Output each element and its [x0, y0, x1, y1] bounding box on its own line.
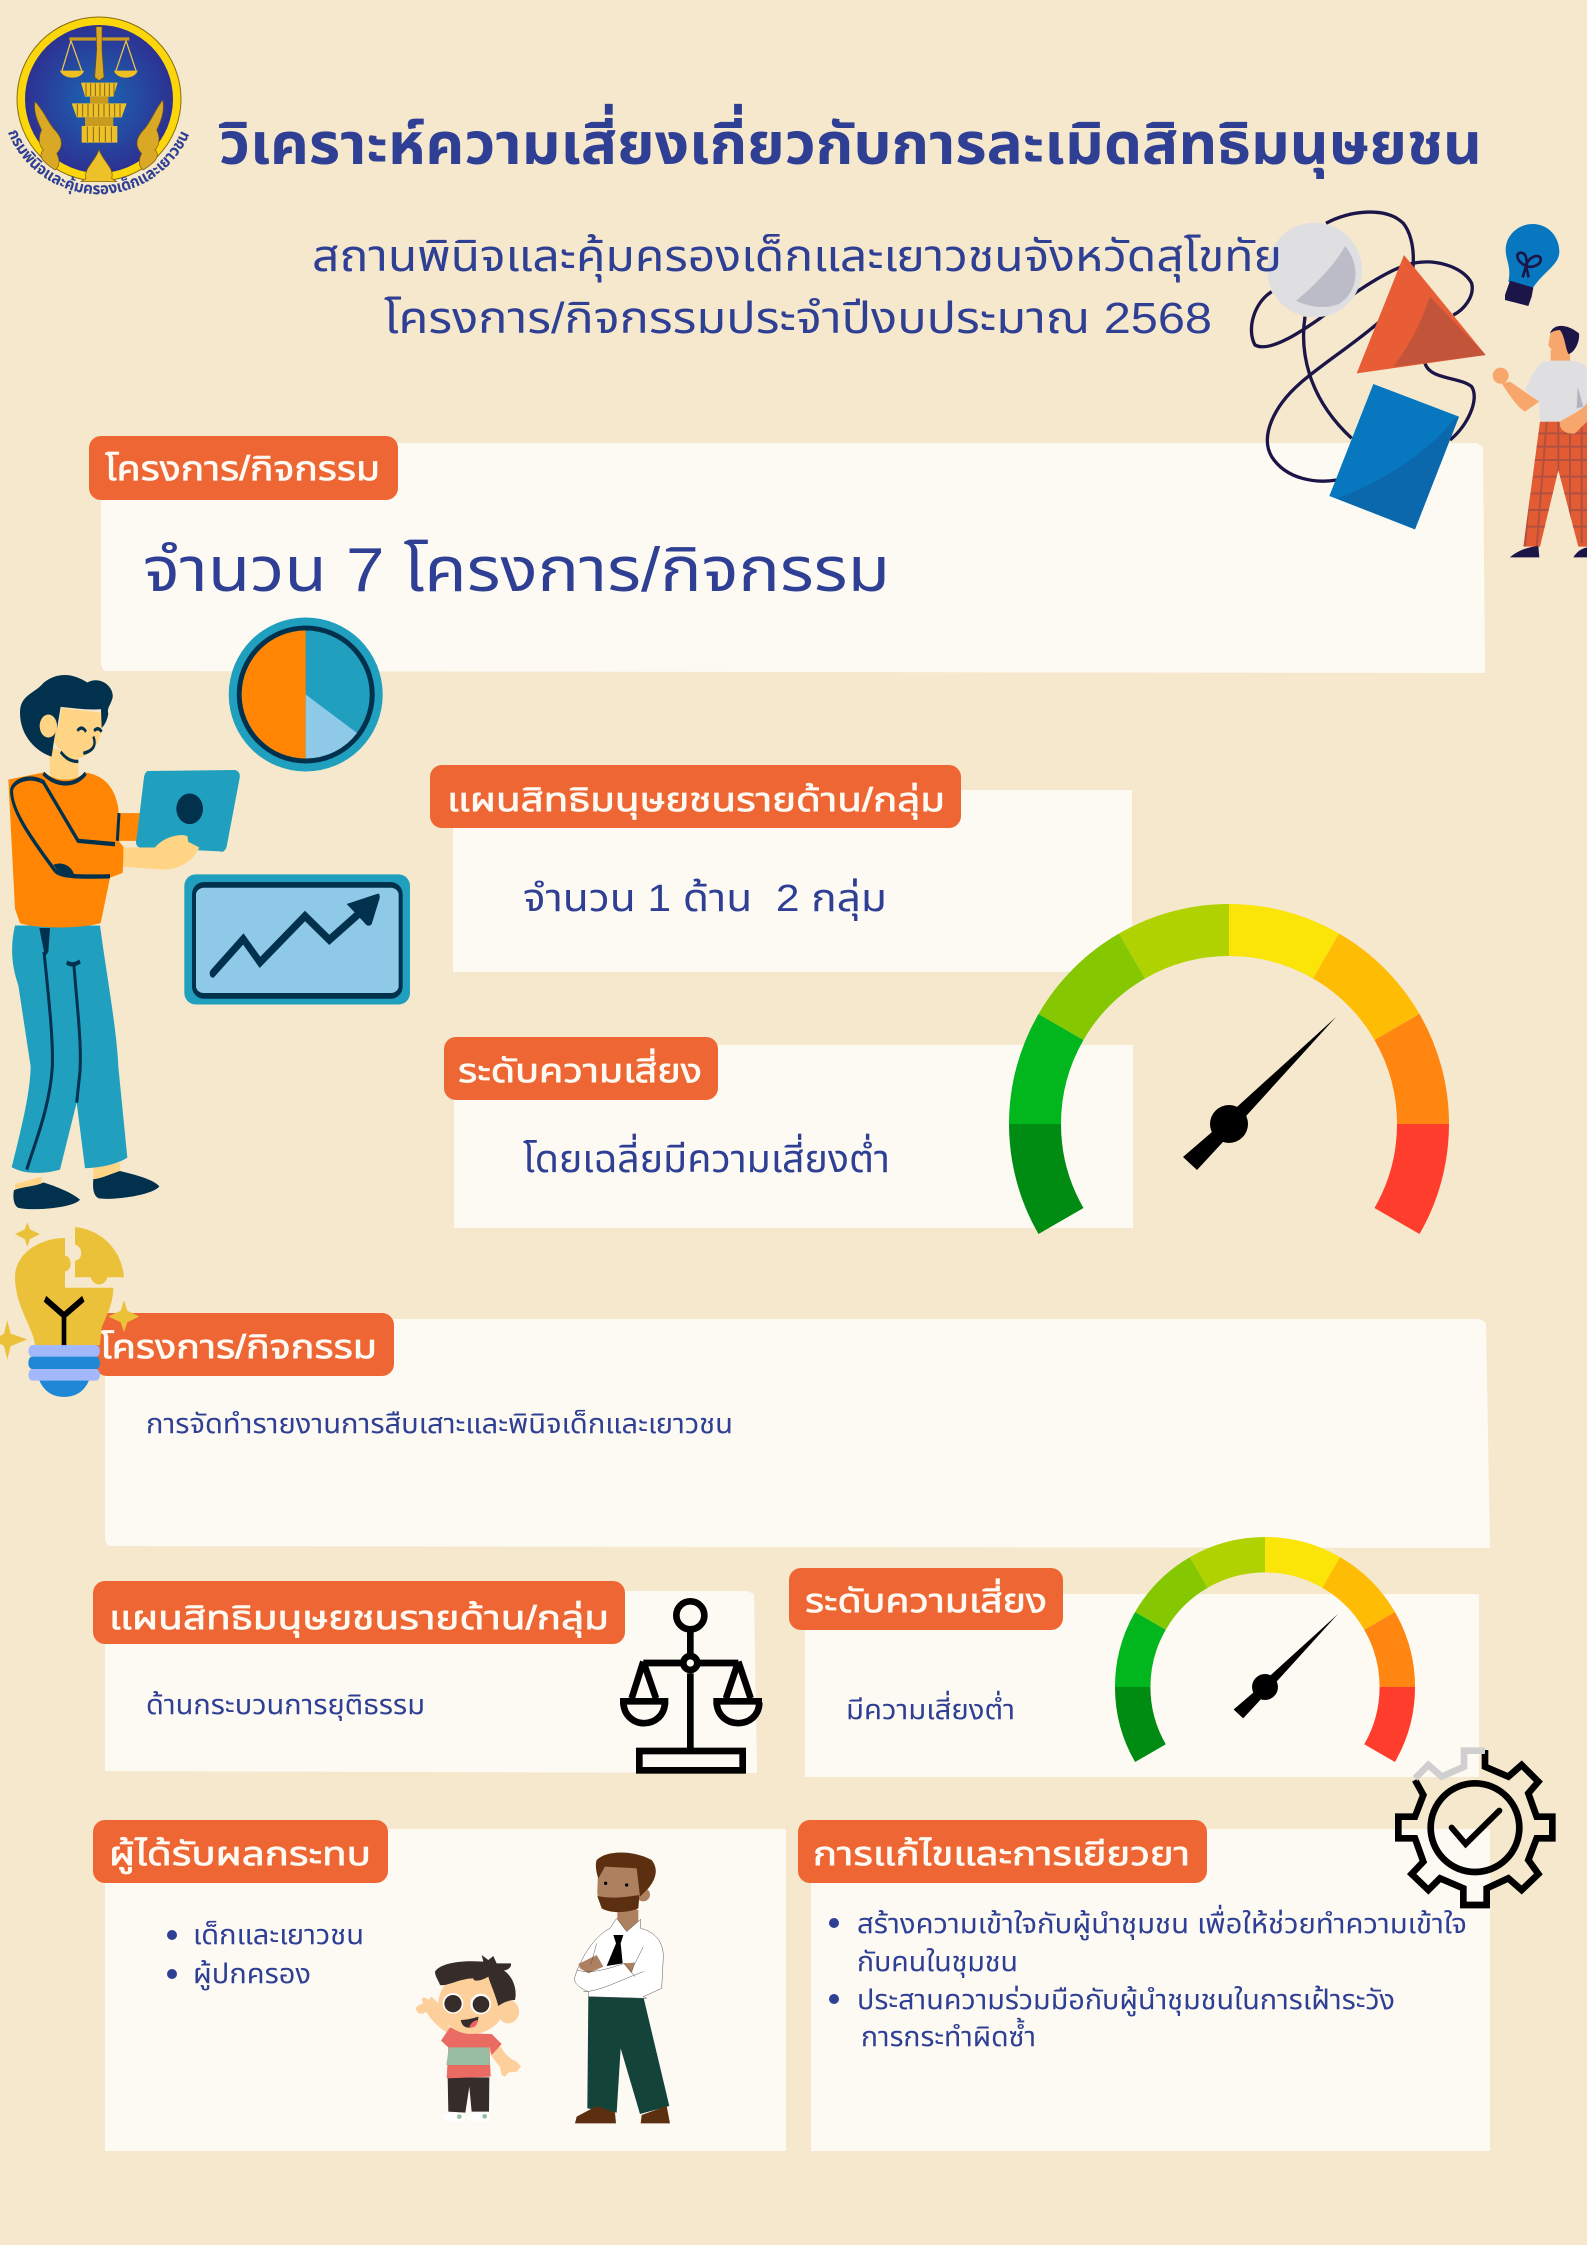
illustration: puzzle light bulb	[0, 1222, 139, 1397]
illustration: standing man with plaid trousers	[1493, 326, 1587, 557]
remedy list: กับคนในชุมชน	[857, 1946, 1018, 1978]
tab: affected groups	[93, 1820, 388, 1883]
tab: human rights plan	[430, 765, 961, 828]
subtitle: fiscal year: โครงการ/กิจกรรมประจำปีงบประมาณ 2568	[384, 294, 1212, 343]
remedy list: การกระทำผิดซ้ำ	[861, 2017, 1036, 2052]
affected groups list: เด็กและเยาวชน	[193, 1919, 364, 1950]
remedy list	[829, 1904, 1467, 2052]
tab: affected groups: ผู้ได้รับผลกระทบ	[109, 1835, 371, 1874]
panel: affected groups	[105, 1829, 786, 2151]
panel: risk level	[454, 1045, 1133, 1228]
illustration: abstract shapes	[1251, 212, 1486, 529]
illustration: boy waving	[416, 1955, 521, 2122]
tab: remedy	[798, 1820, 1207, 1883]
panel: human rights plan	[453, 790, 1132, 972]
remedy list: สร้างความเข้าใจกับผู้นำชุมชน เพื่อให้ช่วยทำความเข้าใจ	[857, 1904, 1467, 1941]
gauge: project risk	[1115, 1537, 1415, 1762]
illustration: man with crossed arms	[575, 1852, 670, 2123]
tab: remedy: การแก้ไขและการเยียวยา	[813, 1835, 1190, 1872]
panel: project detail	[105, 1319, 1490, 1548]
subtitle: facility name: สถานพินิจและคุ้มครองเด็กและเยาวชนจังหวัดสุโขทัย	[312, 232, 1282, 283]
panel: plan detail	[105, 1590, 757, 1773]
panel: risk detail	[805, 1594, 1479, 1777]
icon: scales of justice	[620, 1601, 762, 1770]
title: วิเคราะห์ความเสี่ยงเกี่ยวกับการละเมิดสิทธิมนุษยชน	[218, 103, 1482, 179]
emblem ornaments	[35, 27, 163, 182]
icon: gear with check mark	[1398, 1750, 1552, 1905]
emblem name: กรมพินิจและคุ้มครองเด็กและเยาวชน	[8, 130, 189, 194]
tab: human rights plan: แผนสิทธิมนุษยชนรายด้าน/กลุ่ม	[447, 781, 945, 820]
remedy list: ประสานความร่วมมือกับผู้นำชุมชนในการเฝ้าระวัง	[857, 1984, 1395, 2017]
panel: project count	[101, 443, 1485, 673]
tab: risk detail: ระดับความเสี่ยง	[805, 1578, 1047, 1619]
tab: project detail: โครงการ/กิจกรรม	[100, 1328, 377, 1365]
tab: risk detail	[789, 1568, 1063, 1630]
count text: จำนวน 7 โครงการ/กิจกรรม	[143, 536, 890, 605]
gauge: overall risk	[1009, 904, 1449, 1234]
tab: risk level: ระดับความเสี่ยง	[458, 1048, 702, 1089]
logo: department emblem	[8, 16, 189, 194]
illustration: trend chart card	[184, 874, 410, 1004]
tab: projects	[89, 436, 398, 500]
tab: plan detail	[93, 1581, 625, 1644]
tab: projects: โครงการ/กิจกรรม	[105, 450, 380, 488]
tab: project detail	[95, 1313, 394, 1376]
panel: remedy	[811, 1829, 1490, 2151]
affected groups list	[167, 1919, 364, 1991]
affected groups list: ผู้ปกครอง	[193, 1958, 311, 1991]
tab: risk level	[444, 1037, 718, 1100]
plan detail text: ด้านกระบวนการยุติธรรม	[146, 1689, 425, 1721]
plan text: จำนวน 1 ด้าน 2 กลุ่ม	[523, 878, 887, 921]
project text: การจัดทำรายงานการสืบเสาะและพินิจเด็กและเยาวชน	[146, 1408, 733, 1439]
tab: plan detail: แผนสิทธิมนุษยชนรายด้าน/กลุ่ม	[109, 1599, 609, 1638]
risk text: โดยเฉลี่ยมีความเสี่ยงต่ำ	[523, 1133, 890, 1181]
risk detail text: มีความเสี่ยงต่ำ	[846, 1690, 1015, 1725]
illustration: person with tablet	[8, 675, 240, 1209]
illustration: pie chart	[229, 618, 383, 772]
illustration: blue light bulb	[1505, 224, 1559, 306]
